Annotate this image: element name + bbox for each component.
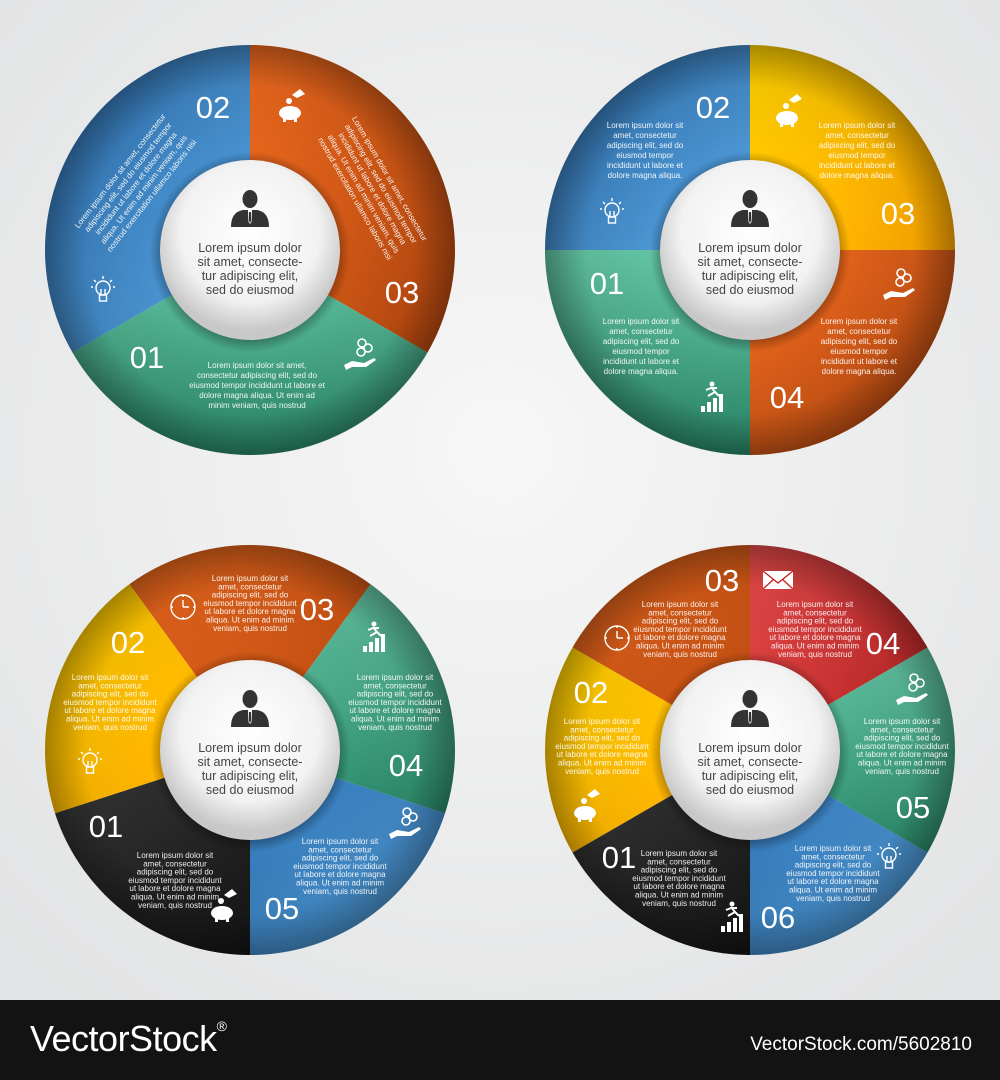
text 03: veniam, quis nostrud bbox=[213, 624, 287, 633]
center text: sed do eiusmod bbox=[206, 283, 294, 297]
icon: runner bbox=[721, 902, 743, 932]
icon: runner bbox=[363, 622, 385, 652]
text 03: adipiscing elit, sed do bbox=[819, 141, 896, 150]
text 01: dolore magna aliqua. bbox=[604, 367, 678, 376]
text 01: veniam, quis nostrud bbox=[642, 899, 716, 908]
text 03: eiusmod tempor bbox=[828, 151, 886, 160]
number 05: 05 bbox=[896, 790, 930, 825]
segment 01 black bbox=[55, 750, 250, 955]
text 06: adipiscing elit, sed do bbox=[795, 861, 872, 870]
banner: watermark footer bbox=[0, 1000, 1000, 1080]
text 01: eiusmod tempor incididunt bbox=[632, 874, 726, 883]
text 04: eiusmod tempor incididunt bbox=[348, 698, 442, 707]
text 04: amet, consectetur bbox=[827, 327, 891, 336]
text 04: incididunt ut labore et bbox=[821, 357, 898, 366]
segment 02 yellow bbox=[545, 648, 750, 852]
text 04: eiusmod tempor incididunt bbox=[768, 625, 862, 634]
icon: piggy bbox=[211, 889, 237, 922]
text 04: dolore magna aliqua. bbox=[822, 367, 896, 376]
segment 04 orange bbox=[750, 250, 955, 455]
text 04: amet, consectetur bbox=[783, 608, 847, 617]
text 03: adipiscing elit, sed do bbox=[642, 617, 719, 626]
text 02 rotated: adipiscing elit, sed do eiusmod tempor bbox=[83, 121, 174, 234]
text 01: adipiscing elit, sed do bbox=[603, 337, 680, 346]
number 03: 03 bbox=[705, 563, 739, 598]
icon: person bbox=[231, 190, 269, 227]
text 01: amet, consectetur bbox=[143, 859, 207, 868]
text 01: Lorem ipsum dolor sit bbox=[641, 849, 718, 858]
text 03: amet, consectetur bbox=[825, 131, 889, 140]
text 03: ut labore et dolore magna bbox=[634, 633, 726, 642]
text 04: ut labore et dolore magna bbox=[769, 633, 861, 642]
text 03 rotated: aliqua. Ut enim ad minim veniam, quis bbox=[326, 133, 401, 255]
center text: tur adipiscing elit, bbox=[202, 269, 298, 283]
center text: sit amet, consecte- bbox=[698, 255, 802, 269]
icon: person bbox=[731, 190, 769, 227]
text 05: aliqua. Ut enim ad minim bbox=[296, 878, 384, 888]
text 03: incididunt ut labore et bbox=[819, 161, 896, 170]
icon: hand gears bbox=[883, 269, 915, 300]
text 01: adipiscing elit, sed do bbox=[641, 866, 718, 875]
number 03: 03 bbox=[881, 196, 915, 231]
text 02: Lorem ipsum dolor sit bbox=[607, 121, 684, 130]
text 05: amet, consectetur bbox=[870, 725, 934, 734]
text 04: aliqua. Ut enim ad minim bbox=[351, 714, 439, 724]
text 01: eiusmod tempor incididunt bbox=[128, 876, 222, 885]
diagram: six segments bbox=[545, 545, 955, 955]
text 01: aliqua. Ut enim ad minim bbox=[635, 890, 723, 900]
text 02: amet, consectetur bbox=[613, 131, 677, 140]
text 02: Lorem ipsum dolor sit bbox=[564, 717, 641, 726]
text 02: ut labore et dolore magna bbox=[64, 706, 156, 715]
segment 03 orange bbox=[250, 45, 455, 352]
center text: Lorem ipsum dolor bbox=[698, 241, 802, 255]
text 05: veniam, quis nostrud bbox=[303, 887, 377, 896]
segment 01 black bbox=[572, 750, 750, 955]
text 04: adipiscing elit, sed do bbox=[777, 617, 854, 626]
text 01: adipiscing elit, sed do bbox=[137, 868, 214, 877]
center text: Lorem ipsum dolor bbox=[198, 241, 302, 255]
segment 03 orange bbox=[572, 545, 750, 750]
text 01: eiusmod tempor bbox=[612, 347, 670, 356]
text 02: veniam, quis nostrud bbox=[73, 723, 147, 732]
center text: sed do eiusmod bbox=[706, 283, 794, 297]
text 02: dolore magna aliqua. bbox=[608, 171, 682, 180]
text 02: adipiscing elit, sed do bbox=[607, 141, 684, 150]
icon: hand gears bbox=[896, 674, 928, 705]
text 02: eiusmod tempor bbox=[616, 151, 674, 160]
text 05: eiusmod tempor incididunt bbox=[855, 742, 949, 751]
text 01: aliqua. Ut enim ad minim bbox=[131, 892, 219, 902]
text 04: adipiscing elit, sed do bbox=[821, 337, 898, 346]
center text: sed do eiusmod bbox=[706, 783, 794, 797]
segment 06 blue bbox=[750, 750, 928, 955]
segment 02 blue bbox=[545, 45, 750, 250]
diagram: four segments bbox=[545, 45, 955, 455]
text 06: aliqua. Ut enim ad minim bbox=[789, 886, 877, 894]
icon: hand gears bbox=[344, 339, 376, 370]
text 01: Lorem ipsum dolor sit bbox=[603, 317, 680, 326]
text 04: Lorem ipsum dolor sit bbox=[821, 317, 898, 326]
icon: piggy bbox=[776, 94, 802, 127]
text 01: eiusmod tempor incididunt ut labore et bbox=[189, 381, 326, 390]
icon: person bbox=[731, 690, 769, 727]
text 02: ut labore et dolore magna bbox=[556, 750, 648, 759]
text 02: adipiscing elit, sed do bbox=[72, 690, 149, 699]
text 02 rotated: aliqua. Ut enim ad minim veniam, quis bbox=[99, 134, 189, 246]
center text: tur adipiscing elit, bbox=[202, 769, 298, 783]
number 03: 03 bbox=[385, 275, 419, 310]
number 01: 01 bbox=[89, 809, 123, 844]
text 04: veniam, quis nostrud bbox=[358, 723, 432, 732]
brand logo text: VectorStock® bbox=[30, 1018, 226, 1059]
icon: bulb bbox=[91, 276, 115, 301]
number 04: 04 bbox=[389, 748, 423, 783]
text 03: ut labore et dolore magna bbox=[204, 607, 296, 616]
text 01: incididunt ut labore et bbox=[603, 357, 680, 366]
segment 05 blue bbox=[250, 750, 445, 955]
text 05: Lorem ipsum dolor sit bbox=[864, 717, 941, 726]
center text: sit amet, consecte- bbox=[198, 255, 302, 269]
center circle bbox=[160, 160, 340, 340]
text 03: amet, consectetur bbox=[648, 608, 712, 617]
text 05: adipiscing elit, sed do bbox=[864, 734, 941, 743]
text 01: minim veniam, quis nostrud bbox=[208, 401, 306, 410]
text 06: veniam, quis nostrud bbox=[796, 894, 870, 903]
text 01: amet, consectetur bbox=[609, 327, 673, 336]
text 02 rotated: nostrud exercitation ullamco laboris nisi bbox=[105, 138, 198, 254]
text 01: Lorem ipsum dolor sit amet, bbox=[208, 361, 306, 370]
icon: bulb bbox=[600, 198, 624, 223]
text 02: incididunt ut labore et bbox=[607, 161, 684, 170]
text 03 rotated: Lorem ipsum dolor sit amet, consectetur bbox=[350, 115, 429, 243]
text 02: aliqua. Ut enim ad minim bbox=[558, 758, 646, 768]
text 03 rotated: nostrud exercitation ullamco laboris nisi bbox=[316, 136, 394, 262]
text 02 rotated: Lorem ipsum dolor sit amet, consectetur bbox=[73, 112, 168, 230]
number 05: 05 bbox=[265, 891, 299, 926]
icon: person bbox=[231, 690, 269, 727]
number 01: 01 bbox=[130, 340, 164, 375]
center text: sed do eiusmod bbox=[206, 783, 294, 797]
segment 05 green bbox=[750, 648, 955, 852]
center text: sit amet, consecte- bbox=[198, 755, 302, 769]
segment 04 green bbox=[250, 584, 455, 813]
text 01: amet, consectetur bbox=[647, 857, 711, 866]
image id text: VectorStock.com/5602810 bbox=[750, 1034, 972, 1055]
icon: envelope bbox=[763, 571, 793, 589]
number 04: 04 bbox=[770, 380, 804, 415]
text 05: eiusmod tempor incididunt bbox=[293, 862, 387, 871]
center text: sit amet, consecte- bbox=[698, 755, 802, 769]
text 04: Lorem ipsum dolor sit bbox=[357, 673, 434, 682]
segment 02 yellow bbox=[45, 584, 250, 813]
text 01: Lorem ipsum dolor sit bbox=[137, 851, 214, 860]
number 01: 01 bbox=[590, 266, 624, 301]
text 05: ut labore et dolore magna bbox=[856, 750, 948, 759]
text 04: adipiscing elit, sed do bbox=[357, 690, 434, 699]
icon: piggy bbox=[574, 789, 600, 822]
text 03: amet, consectetur bbox=[218, 582, 282, 591]
text 02: veniam, quis nostrud bbox=[565, 767, 639, 776]
text 05: adipiscing elit, sed do bbox=[302, 854, 379, 863]
icon: clock bbox=[171, 595, 195, 619]
segment 03 yellow bbox=[750, 45, 955, 250]
number 06: 06 bbox=[761, 900, 795, 935]
text 02: aliqua. Ut enim ad minim bbox=[66, 714, 154, 724]
text 04: aliqua. Ut enim ad minim bbox=[771, 642, 859, 650]
text 05: aliqua. Ut enim ad minim bbox=[858, 758, 946, 768]
text 02: eiusmod tempor incididunt bbox=[63, 698, 157, 707]
text 01: veniam, quis nostrud bbox=[138, 901, 212, 910]
number 02: 02 bbox=[111, 625, 145, 660]
text 03: Lorem ipsum dolor sit bbox=[819, 121, 896, 130]
icon: bulb bbox=[877, 843, 901, 868]
text 03: eiusmod tempor incididunt bbox=[203, 599, 297, 608]
text 03: adipiscing elit, sed do bbox=[212, 591, 289, 600]
text 04: veniam, quis nostrud bbox=[778, 650, 852, 659]
number 04: 04 bbox=[866, 626, 900, 661]
text 02: amet, consectetur bbox=[78, 681, 142, 690]
number 02: 02 bbox=[196, 90, 230, 125]
text 04: ut labore et dolore magna bbox=[349, 706, 441, 715]
text 06: eiusmod tempor incididunt bbox=[786, 869, 880, 878]
text 01: ut labore et dolore magna bbox=[633, 882, 725, 891]
text 05: amet, consectetur bbox=[308, 845, 372, 854]
text 06: amet, consectetur bbox=[801, 852, 865, 861]
text 06: ut labore et dolore magna bbox=[787, 877, 879, 886]
text 01: dolore magna aliqua. Ut enim ad bbox=[199, 391, 315, 400]
number 03: 03 bbox=[300, 592, 334, 627]
text 05: Lorem ipsum dolor sit bbox=[302, 837, 379, 846]
icon: clock bbox=[605, 626, 629, 650]
text 02: Lorem ipsum dolor sit bbox=[72, 673, 149, 682]
icon: bulb bbox=[78, 748, 102, 773]
segment 01 green bbox=[72, 250, 428, 455]
number 01: 01 bbox=[602, 840, 636, 875]
icon: runner bbox=[701, 382, 723, 412]
text 06: Lorem ipsum dolor sit bbox=[795, 844, 872, 853]
diagram: three segments bbox=[45, 45, 455, 455]
number 02: 02 bbox=[696, 90, 730, 125]
diagram: five segments bbox=[45, 545, 455, 955]
center text: tur adipiscing elit, bbox=[702, 769, 798, 783]
text 04: amet, consectetur bbox=[363, 681, 427, 690]
text 03 rotated: adipiscing elit, sed do eiusmod tempor bbox=[343, 123, 419, 245]
text 01: ut labore et dolore magna bbox=[129, 884, 221, 893]
center text: tur adipiscing elit, bbox=[702, 269, 798, 283]
text 02 rotated: incididunt ut labore et dolore magna bbox=[93, 130, 179, 236]
icon: hand gears bbox=[389, 808, 421, 839]
text 03: eiusmod tempor incididunt bbox=[633, 625, 727, 634]
text 03 rotated: incididunt ut labore et dolore magna bbox=[336, 131, 408, 247]
text 05: ut labore et dolore magna bbox=[294, 870, 386, 879]
text 02: amet, consectetur bbox=[570, 725, 634, 734]
segment 01 green bbox=[545, 250, 750, 455]
center text: Lorem ipsum dolor bbox=[198, 741, 302, 755]
text 05: veniam, quis nostrud bbox=[865, 767, 939, 776]
text 03: veniam, quis nostrud bbox=[643, 650, 717, 659]
icon: piggy bbox=[279, 89, 305, 122]
text 03: dolore magna aliqua. bbox=[820, 171, 894, 180]
text 02: eiusmod tempor incididunt bbox=[555, 742, 649, 751]
segment 04 red bbox=[750, 545, 928, 750]
center circle bbox=[660, 160, 840, 340]
text 02: adipiscing elit, sed do bbox=[564, 734, 641, 743]
text 04: Lorem ipsum dolor sit bbox=[777, 600, 854, 609]
text 01: consectetur adipiscing elit, sed do bbox=[197, 371, 318, 380]
segment 03 orange bbox=[130, 545, 370, 750]
text 03: Lorem ipsum dolor sit bbox=[212, 574, 289, 583]
text 03: aliqua. Ut enim ad minim bbox=[636, 642, 724, 650]
center circle bbox=[660, 660, 840, 840]
number 02: 02 bbox=[574, 675, 608, 710]
center text: Lorem ipsum dolor bbox=[698, 741, 802, 755]
text 04: eiusmod tempor bbox=[830, 347, 888, 356]
text 03: Lorem ipsum dolor sit bbox=[642, 600, 719, 609]
center circle bbox=[160, 660, 340, 840]
text 03: aliqua. Ut enim ad minim bbox=[206, 616, 294, 624]
segment 02 blue bbox=[45, 45, 250, 352]
